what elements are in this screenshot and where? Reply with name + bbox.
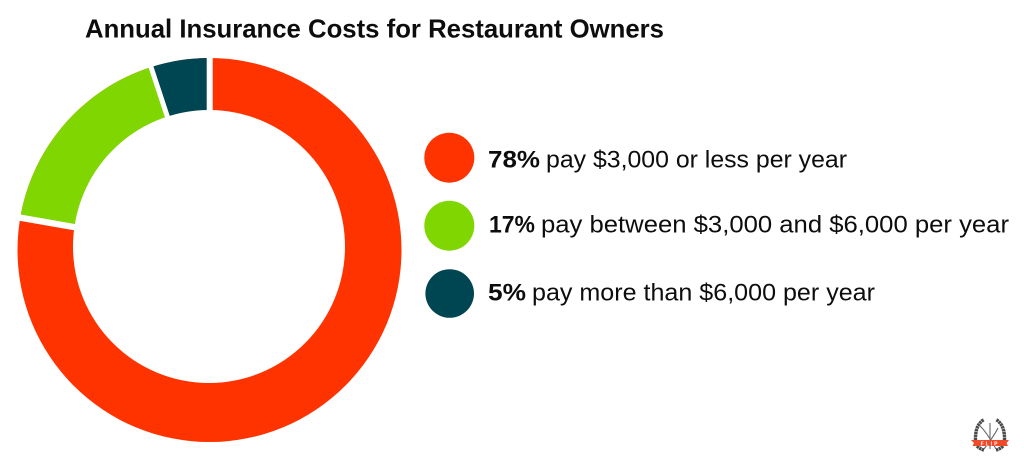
banner: [971, 440, 1009, 446]
segment gaps: [10, 50, 210, 232]
label: 78%: 78%: [488, 146, 540, 173]
swatch: navy: [425, 269, 474, 318]
legend item: 17%: [424, 201, 1009, 251]
segment: 5% navy: [151, 58, 210, 140]
legend: [424, 133, 1009, 318]
donut chart: [10, 50, 402, 442]
swatch: red: [424, 133, 474, 183]
label: pay more than $6,000 per year: pay more than $6,000 per year: [532, 280, 875, 307]
legend item: 5%: [425, 269, 875, 318]
label: pay $3,000 or less per year: pay $3,000 or less per year: [546, 146, 847, 173]
swatch: green: [424, 201, 474, 251]
segment: 78% red: [18, 58, 402, 442]
donut hole: [73, 110, 345, 383]
banner text: FLIP: [981, 442, 999, 448]
label: 5%: 5%: [488, 280, 526, 307]
utensils: [979, 423, 998, 449]
label: pay between $3,000 and $6,000 per year: pay between $3,000 and $6,000 per year: [541, 211, 1009, 238]
title: Annual Insurance Costs for Restaurant Owners: [85, 14, 664, 44]
wreath: [975, 420, 1005, 450]
segment: 17% green: [20, 67, 175, 232]
label: 17%: 17%: [489, 211, 535, 238]
logo: [971, 420, 1009, 450]
legend item: 78%: [424, 133, 847, 183]
